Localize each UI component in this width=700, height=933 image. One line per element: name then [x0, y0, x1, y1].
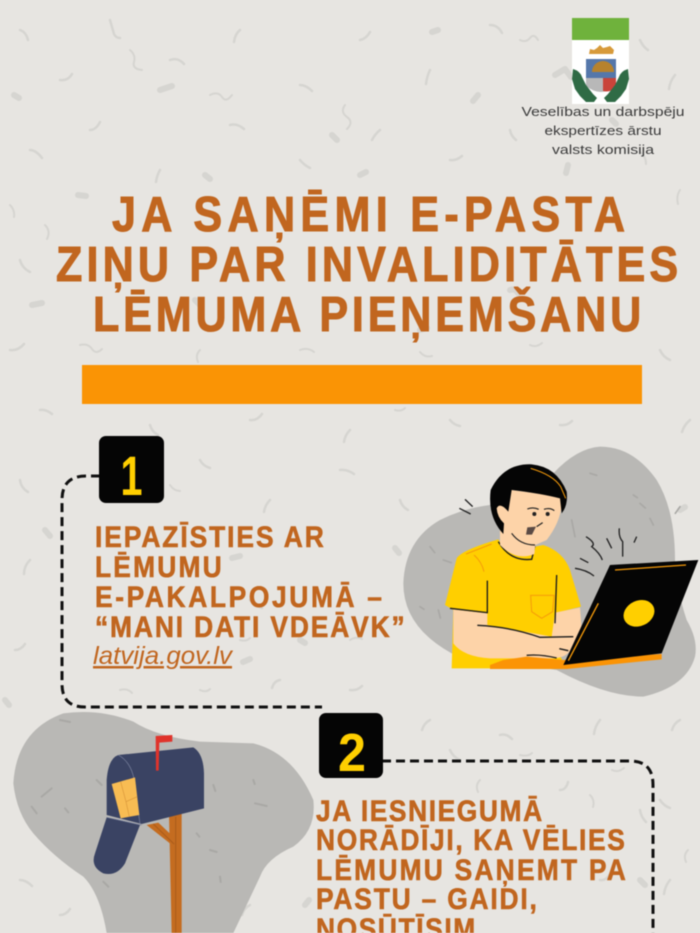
motion lines [459, 499, 637, 576]
flag [156, 735, 172, 771]
orange divider bar [82, 365, 642, 404]
blob speckles [32, 720, 267, 887]
agency name [522, 105, 685, 157]
mailbox door [94, 817, 140, 874]
step 2 text: JA IESNIEGUMĀ [316, 793, 542, 827]
title: JA SAŅĒMI E-PASTA [112, 186, 625, 243]
title: ZIŅU PAR INVALIDITĀTES [56, 236, 678, 293]
badge: step 2: 2 [338, 723, 366, 783]
yellow t-shirt [445, 539, 581, 668]
blob speckles [420, 473, 680, 618]
step 1 link: latvija.gov.lv [93, 642, 234, 670]
arm [453, 608, 582, 658]
step 1 text: E-PAKALPOJUMĀ – [95, 579, 382, 613]
step 2 text: NORĀDĪJI, KA VĒLIES [316, 822, 625, 856]
ear [495, 504, 507, 520]
badge: step 1 [99, 436, 164, 507]
laptop lid [563, 560, 698, 665]
illustration: person with laptop [403, 447, 698, 697]
step 1 text: IEPAZĪSTIES AR [95, 519, 324, 553]
post [169, 813, 182, 933]
badge: step 1: 1 [120, 444, 142, 507]
logo: coat of arms [572, 18, 629, 104]
pocket [531, 595, 554, 618]
step 1 text: “MANI DATI VDEĀVK” [95, 609, 405, 643]
blob background [403, 447, 696, 697]
face details [532, 512, 536, 516]
step 2 text: PASTU – GAIDI, [316, 881, 537, 915]
letter [112, 777, 139, 818]
agency name: Veselības un darbspēju [522, 105, 685, 119]
connector: step 2 dashed line [382, 761, 653, 933]
step 1 text: LĒMUMU [95, 549, 222, 583]
title [56, 186, 678, 343]
connector: step 1 dashed line [62, 476, 322, 707]
agency name: valsts komisija [552, 143, 654, 157]
illustration: mailbox [13, 712, 314, 933]
badge: step 2 [319, 713, 383, 783]
step 2 text: LĒMUMU SAŅEMT PA [316, 852, 626, 886]
blob background [13, 712, 314, 933]
laptop base [490, 654, 662, 669]
step 1 text [95, 519, 405, 643]
neck and face [497, 490, 562, 556]
title: LĒMUMA PIEŅEMŠANU [93, 286, 641, 343]
laptop logo [619, 595, 659, 632]
hair [490, 464, 567, 534]
step 2 text [316, 793, 626, 933]
agency name: ekspertīzes ārstu [544, 124, 662, 138]
mailbox body [107, 747, 204, 824]
